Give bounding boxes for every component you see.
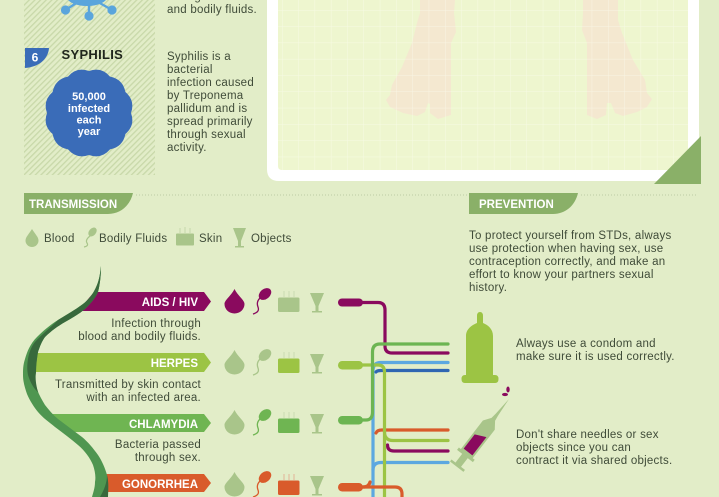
description: Infection through — [111, 318, 201, 330]
description: with an infected area. — [85, 392, 201, 404]
description: through sex. — [135, 452, 201, 464]
legend: transmission types: Objects — [251, 233, 292, 245]
legend icon: bodily fluids — [84, 227, 98, 247]
text: syphilis description — [167, 0, 257, 154]
heading: prevention — [469, 193, 578, 214]
text: syphilis description: and bodily fluids. — [167, 4, 257, 16]
folded corner — [654, 136, 701, 184]
text: syphilis description: pallidum and is — [167, 103, 247, 115]
banner — [46, 414, 211, 432]
number badge 6 — [25, 48, 49, 68]
text: condom advice — [516, 338, 675, 363]
banner — [32, 353, 211, 372]
row: AIDS / HIV: AIDS / HIV — [142, 297, 198, 309]
text: needle advice: objects since you can — [516, 442, 631, 454]
heading: transmission — [24, 193, 133, 214]
heading: transmission: TRANSMISSION — [29, 199, 117, 211]
text: prevention intro: contraception correctly, and make an — [469, 256, 665, 268]
illustration: right foot — [582, 0, 652, 119]
icon: syringe — [449, 386, 517, 473]
icons row: herpes — [224, 347, 324, 375]
heading: prevention: PREVENTION — [479, 199, 554, 211]
text: syphilis description: infection caused — [167, 77, 254, 89]
text: syphilis description: by Treponema — [167, 90, 244, 102]
description — [78, 318, 201, 343]
legend icon: skin — [176, 227, 194, 246]
illustration: ribbon stem — [23, 266, 108, 497]
illustration: left foot — [386, 0, 456, 119]
row: chlamydia: CHLAMYDIA — [129, 419, 198, 431]
description — [55, 379, 202, 404]
text: prevention intro: use protection when having sex, use — [469, 243, 663, 255]
text: prevention intro — [469, 230, 672, 294]
row: gonorrhea: GONORRHEA — [122, 479, 198, 491]
number badge 6: 6 — [32, 50, 39, 64]
stat burst: 50,000 infected each year — [46, 70, 132, 156]
text: syphilis description: activity. — [167, 142, 207, 154]
icon: virus — [61, 0, 117, 21]
stat burst: 50,000 infected each year: 50,000 — [72, 91, 106, 103]
text: condom advice: make sure it is used correctly. — [516, 351, 675, 363]
stat burst: 50,000 infected each year: year — [78, 126, 101, 138]
row: gonorrhea — [100, 474, 211, 492]
panel: body diagram frame — [267, 0, 701, 184]
icon: condom — [462, 312, 498, 383]
text: prevention intro: effort to know your partners sexual — [469, 269, 654, 281]
panel: syphilis card — [24, 0, 155, 175]
text: needle advice: contract it via shared objects. — [516, 455, 672, 467]
legend: transmission types: Blood — [44, 233, 75, 245]
banner — [100, 474, 211, 492]
legend: transmission types — [26, 227, 292, 248]
description: Bacteria passed — [115, 439, 201, 451]
text: needle advice — [516, 429, 672, 467]
text: prevention intro: history. — [469, 282, 507, 294]
description: Transmitted by skin contact — [55, 379, 202, 391]
row: AIDS / HIV — [78, 292, 211, 343]
legend icon: objects — [233, 228, 246, 248]
stat burst: 50,000 infected each year: infected — [68, 103, 110, 115]
text: syphilis description: through sexual — [167, 129, 246, 141]
text: syphilis description: spread primarily — [167, 116, 253, 128]
text: syphilis description: bacterial — [167, 64, 213, 76]
description: blood and bodily fluids. — [78, 331, 201, 343]
icons row: AIDS / HIV — [224, 286, 324, 314]
legend icon: blood — [26, 229, 38, 247]
banner — [78, 292, 211, 311]
icons row: gonorrhea — [224, 469, 324, 497]
heading: syphilis: SYPHILIS — [62, 47, 123, 62]
connector lines — [363, 302, 448, 497]
connector pills — [338, 298, 363, 492]
description — [115, 439, 201, 464]
text: condom advice: Always use a condom and — [516, 338, 656, 350]
legend: transmission types: Bodily Fluids — [99, 233, 167, 245]
text: prevention intro: To protect yourself from STDs, always — [469, 230, 672, 242]
legend: transmission types: Skin — [199, 233, 222, 245]
text: syphilis description: Syphilis is a — [167, 51, 231, 63]
icons row: chlamydia — [224, 407, 324, 435]
blood drops — [502, 386, 510, 396]
stat burst: 50,000 infected each year: each — [76, 114, 102, 126]
row: chlamydia — [46, 414, 211, 464]
row: herpes: HERPES — [151, 358, 198, 370]
text: needle advice: Don't share needles or sex — [516, 429, 659, 441]
row: herpes — [32, 353, 211, 404]
